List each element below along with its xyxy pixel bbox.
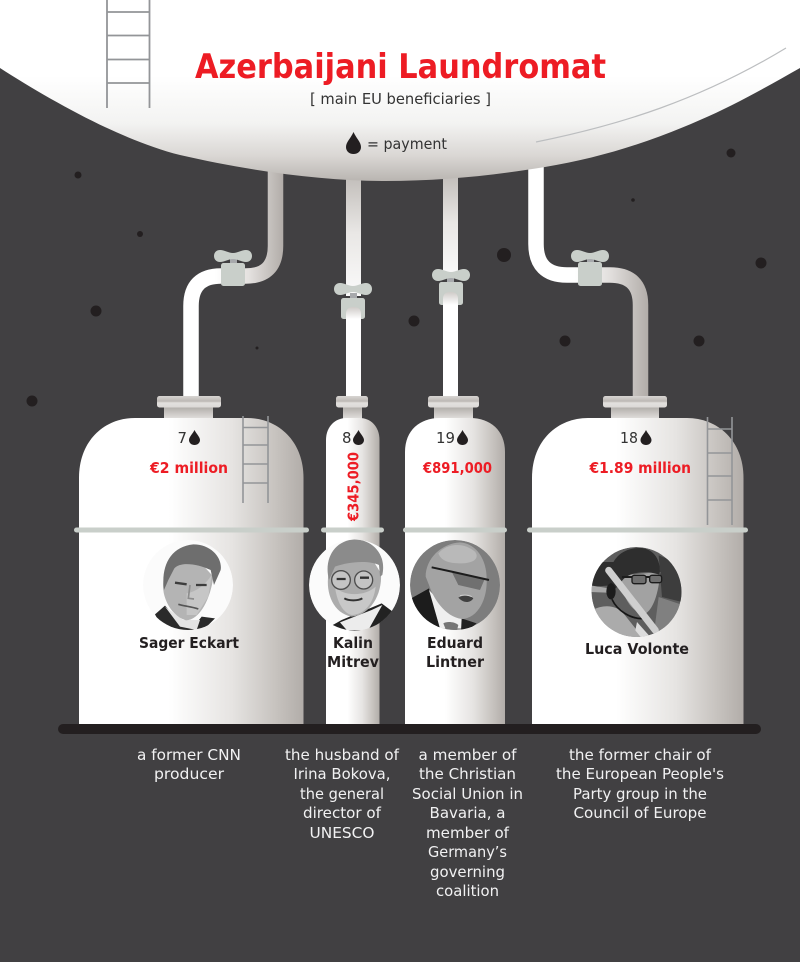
- description: Luca Volonte: [556, 746, 724, 822]
- base platform: [58, 724, 761, 734]
- amount: €1.89 million: €1.89 million: [589, 459, 691, 477]
- photo: Kalin Mitrev: [309, 539, 402, 632]
- payment count: 8: [342, 429, 364, 447]
- description: Kalin Mitrev: the general: [300, 785, 384, 803]
- name: Luca Volonte: Luca Volonte: [585, 640, 689, 658]
- description: Eduard Lintner: governing: [430, 863, 505, 881]
- panel: Kalin Mitrev tank: [309, 396, 402, 724]
- ladder: reservoir: [107, 0, 150, 108]
- description: Eduard Lintner: [412, 746, 523, 900]
- amount: €345,000: €345,000: [344, 452, 362, 522]
- pipe: Sager Eckart: [191, 165, 276, 400]
- description: Kalin Mitrev: UNESCO: [310, 824, 374, 842]
- description: Kalin Mitrev: director of: [303, 804, 382, 822]
- name: Eduard Lintner: Lintner: [426, 653, 484, 671]
- valve: Eduard Lintner pipe: [432, 269, 470, 305]
- photo: Sager Eckart: [155, 541, 233, 630]
- description: Kalin Mitrev: [285, 746, 400, 842]
- pipe: Luca Volonte: [536, 160, 640, 400]
- payment count: 19: [436, 429, 468, 447]
- description: Kalin Mitrev: Irina Bokova,: [294, 765, 390, 783]
- photo: Eduard Lintner: [408, 540, 500, 632]
- photo: Luca Volonte: [590, 547, 684, 639]
- payment count: 7: 7: [178, 429, 187, 447]
- main reservoir: [0, 0, 800, 181]
- name: Kalin Mitrev: [327, 634, 379, 671]
- valve: Kalin Mitrev pipe: [334, 283, 372, 319]
- ink dots scattered on background: [26, 148, 766, 406]
- panel: Sager Eckart tank: [74, 396, 309, 724]
- payment count: 8: 8: [342, 429, 352, 447]
- description: Eduard Lintner: coalition: [436, 882, 499, 900]
- title: Azerbaijani Laundromat: [195, 47, 606, 87]
- name: Eduard Lintner: Eduard: [427, 634, 483, 652]
- description: Sager Eckart: [137, 746, 241, 783]
- legend: payment: [346, 132, 447, 154]
- icon: oil drop: [346, 132, 361, 154]
- name: Sager Eckart: Sager Eckart: [139, 634, 240, 652]
- description: Luca Volonte: the European People's: [556, 765, 724, 783]
- description: Eduard Lintner: Bavaria, a: [430, 804, 506, 822]
- valve: Luca Volonte pipe: [571, 250, 609, 286]
- description: Eduard Lintner: Social Union in: [412, 785, 523, 803]
- description: Luca Volonte: the former chair of: [569, 746, 712, 764]
- panel: Luca Volonte tank: [527, 396, 748, 724]
- description: Kalin Mitrev: the husband of: [285, 746, 400, 764]
- pipe: Eduard Lintner: [432, 170, 470, 400]
- payment count: 19: 19: [436, 429, 455, 447]
- description: Eduard Lintner: a member of: [418, 746, 517, 764]
- description: Luca Volonte: Party group in the: [573, 785, 707, 803]
- valve: Sager Eckart pipe: [214, 250, 252, 286]
- payment count: 7: [178, 429, 200, 447]
- amount: €891,000: €891,000: [422, 459, 492, 477]
- subtitle: [ main EU beneficiaries ]: [310, 90, 491, 108]
- pipe: Kalin Mitrev: [334, 170, 372, 400]
- name: Kalin Mitrev: Mitrev: [327, 653, 379, 671]
- name: Eduard Lintner: [426, 634, 484, 671]
- description: Eduard Lintner: Germany’s: [428, 843, 507, 861]
- description: Sager Eckart: producer: [154, 765, 225, 783]
- payment count: 18: [620, 429, 652, 447]
- description: Eduard Lintner: the Christian: [419, 765, 516, 783]
- description: Eduard Lintner: member of: [426, 824, 510, 842]
- ladder: Sager Eckart tank: [243, 416, 268, 503]
- reservoir highlight line: [536, 48, 786, 142]
- description: Luca Volonte: Council of Europe: [574, 804, 706, 822]
- description: Sager Eckart: a former CNN: [137, 746, 241, 764]
- payment count: 18: 18: [620, 429, 638, 447]
- panel: Eduard Lintner tank: [403, 396, 507, 724]
- amount: €2 million: €2 million: [149, 459, 228, 477]
- legend: payment: = payment: [367, 135, 447, 153]
- ladder: Luca Volonte tank: [708, 417, 732, 525]
- name: Kalin Mitrev: Kalin: [333, 634, 373, 652]
